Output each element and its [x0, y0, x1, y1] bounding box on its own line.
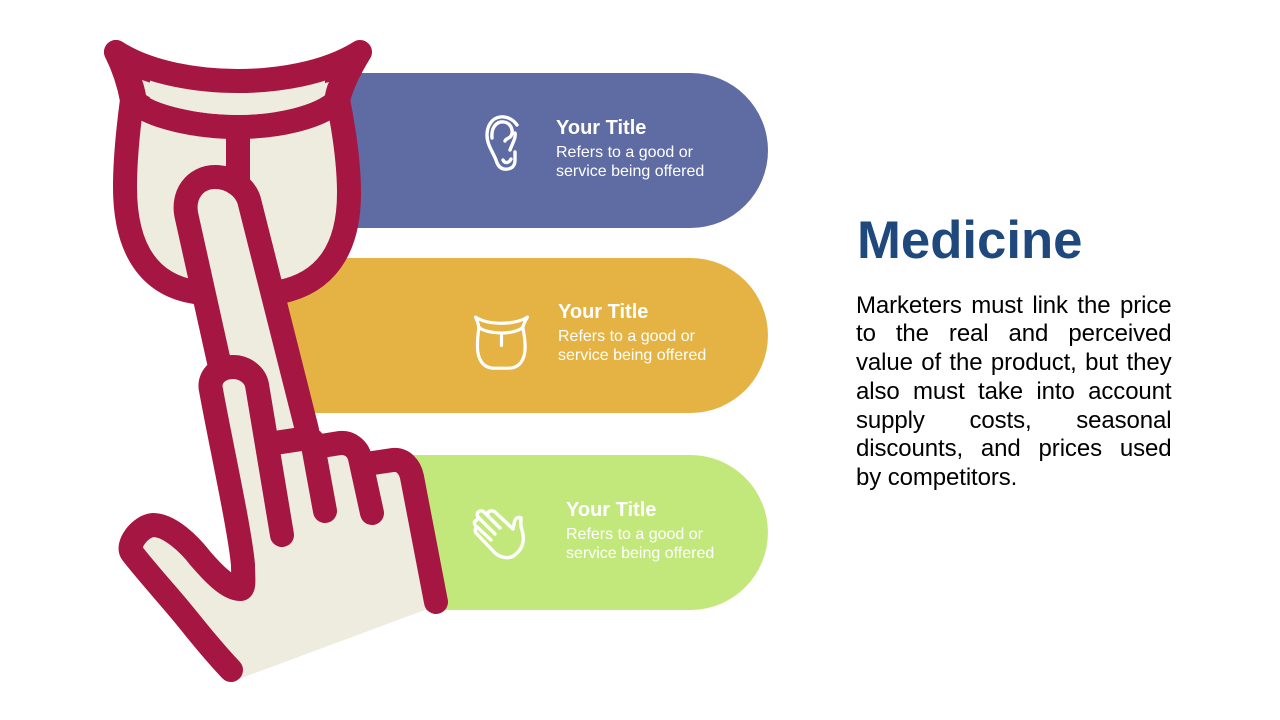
- panel: yellow pill: [270, 258, 768, 413]
- text block: yellow pill: service being offered: [558, 346, 706, 364]
- icon: waving hand: [474, 511, 523, 558]
- heading: Medicine: [857, 211, 1082, 270]
- body paragraph: to the real and perceived: [856, 320, 1172, 347]
- text block: blue pill: service being offered: [556, 162, 704, 180]
- icon: tongue: [476, 317, 527, 368]
- body paragraph: value of the product, but they: [856, 349, 1172, 376]
- text block: green pill: Your Title: [566, 498, 656, 520]
- text block: blue pill: Refers to a good or: [556, 144, 693, 160]
- illustration: tongue: [116, 52, 360, 292]
- text block: yellow pill: Refers to a good or: [558, 328, 695, 344]
- body paragraph: supply costs, seasonal: [856, 407, 1172, 434]
- text block: blue pill: Your Title: [556, 116, 646, 138]
- body paragraph: discounts, and prices used: [856, 435, 1172, 462]
- text block: green pill: service being offered: [566, 544, 714, 562]
- body paragraph: also must take into account: [856, 378, 1172, 405]
- body paragraph: by competitors.: [856, 464, 1017, 491]
- text block: green pill: Refers to a good or: [566, 526, 703, 542]
- text block: yellow pill: [558, 300, 706, 364]
- panel: green pill: [390, 455, 768, 610]
- text block: green pill: [566, 498, 714, 562]
- body paragraph: Marketers must link the price: [856, 292, 1172, 318]
- illustration: hand: [131, 367, 436, 680]
- text block: yellow pill: Your Title: [558, 300, 648, 322]
- icon: ear: [487, 117, 517, 169]
- text block: blue pill: [556, 116, 704, 180]
- panel: blue pill: [330, 73, 768, 228]
- body paragraph: [856, 292, 1172, 491]
- illustration: index finger: [186, 177, 307, 442]
